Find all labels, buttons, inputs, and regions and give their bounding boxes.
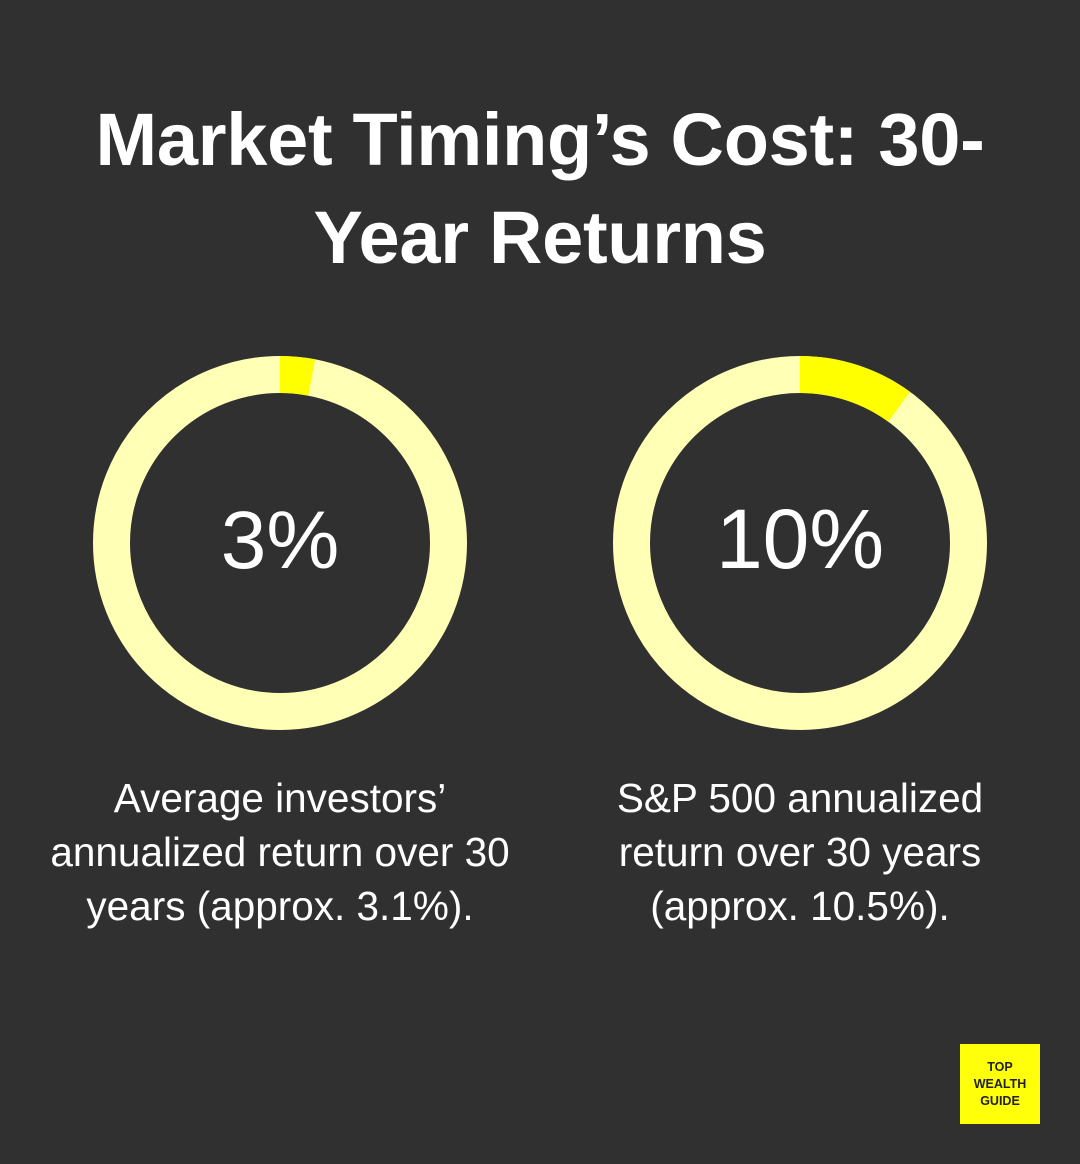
donut: 10% — [632, 374, 968, 712]
label: S&P 500: S&P 500 annualized — [617, 775, 983, 821]
title: Year Returns — [314, 196, 766, 279]
label: S&P 500 — [617, 775, 983, 929]
label: average investors — [50, 775, 510, 929]
label: S&P 500: (approx. 10.5%). — [650, 883, 950, 929]
label: average investors: years (approx. 3.1%). — [86, 883, 474, 929]
label: average investors: Average investors’ — [114, 775, 446, 821]
logo — [960, 1044, 1040, 1124]
donut: 3% — [112, 374, 448, 712]
label: S&P 500: return over 30 years — [619, 829, 981, 875]
logo: GUIDE — [980, 1094, 1020, 1108]
label: average investors: annualized return over 30 — [50, 829, 510, 875]
title — [96, 98, 984, 279]
donut: 10%: 10% — [716, 492, 884, 586]
logo: TOP — [987, 1060, 1013, 1074]
title: Market Timing’s Cost: 30- — [96, 98, 984, 181]
donut: 3%: 3% — [221, 495, 339, 586]
logo: WEALTH — [974, 1076, 1026, 1090]
